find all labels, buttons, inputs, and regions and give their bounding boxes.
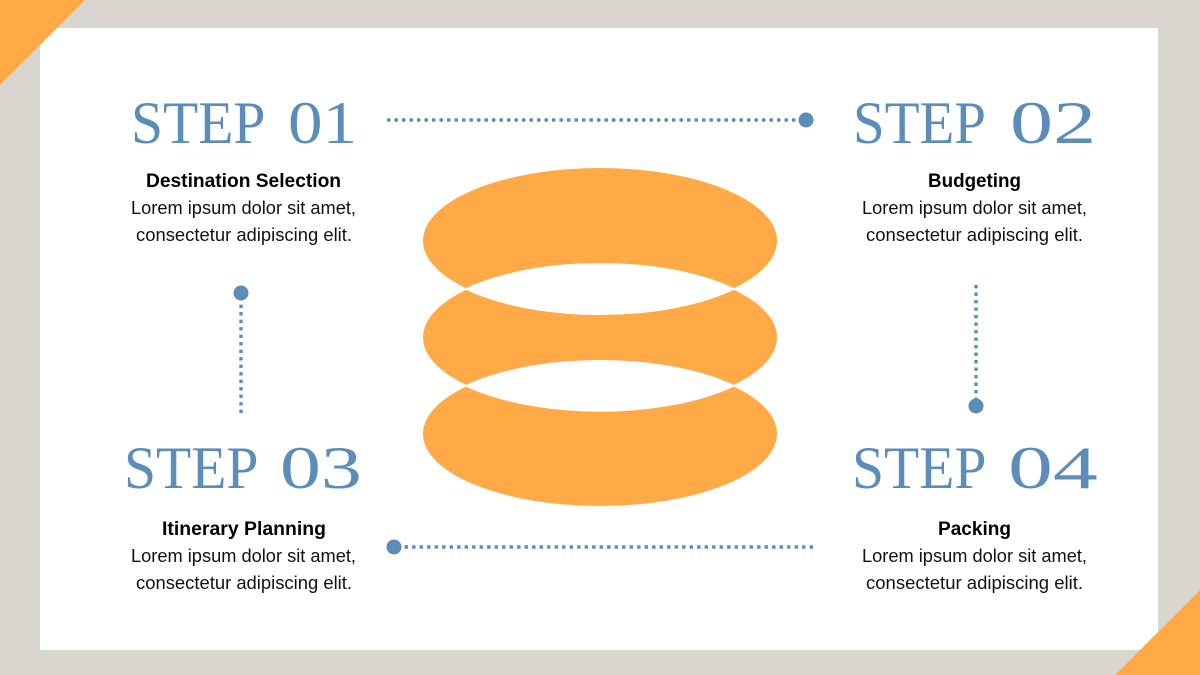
arrow: step 01 to step 02 — [387, 112, 814, 128]
step 02 block — [853, 90, 1096, 245]
arrow: step 03 to step 01 — [234, 286, 248, 413]
step 02 description: Lorem ipsum dolor sit amet, — [862, 198, 1087, 218]
step 01 block — [131, 89, 357, 245]
step 03 description: consectetur adipiscing elit. — [136, 573, 352, 593]
step 01 title: 01 — [288, 89, 357, 156]
step 03 title: STEP — [124, 435, 258, 501]
step 03 description: Lorem ipsum dolor sit amet, — [131, 546, 356, 566]
step 03 heading: Itinerary Planning — [162, 519, 326, 540]
step 04 block — [852, 435, 1098, 593]
step 03 title — [124, 434, 362, 501]
central graphic: three overlapping orange ellipses — [422, 167, 778, 507]
step 02 heading: Budgeting — [928, 171, 1021, 192]
step 01 title — [131, 89, 357, 156]
step 04 title — [852, 435, 1098, 501]
step 02 title — [853, 90, 1096, 157]
step 01 description: consectetur adipiscing elit. — [136, 225, 352, 245]
step 04 title: 04 — [1008, 435, 1098, 501]
step 02 description: consectetur adipiscing elit. — [866, 225, 1083, 245]
step 01 description: Lorem ipsum dolor sit amet, — [131, 198, 356, 218]
step 04 description: Lorem ipsum dolor sit amet, — [862, 546, 1087, 566]
arrow: step 02 to step 04 — [968, 285, 984, 414]
step 03 block — [124, 434, 362, 593]
step 04 description: consectetur adipiscing elit. — [866, 573, 1083, 593]
step 04 heading: Packing — [938, 519, 1011, 540]
step 02 title: 02 — [1010, 90, 1096, 157]
corner triangle: bottom right — [1115, 590, 1200, 675]
arrow: step 04 to step 03 — [386, 540, 813, 554]
step 02 title: STEP — [853, 90, 986, 156]
step 03 title: 03 — [280, 434, 362, 501]
step 04 title: STEP — [852, 435, 986, 501]
step 01 heading: Destination Selection — [146, 171, 341, 192]
corner triangle: top left — [0, 0, 85, 85]
step 01 title: STEP — [131, 90, 265, 156]
